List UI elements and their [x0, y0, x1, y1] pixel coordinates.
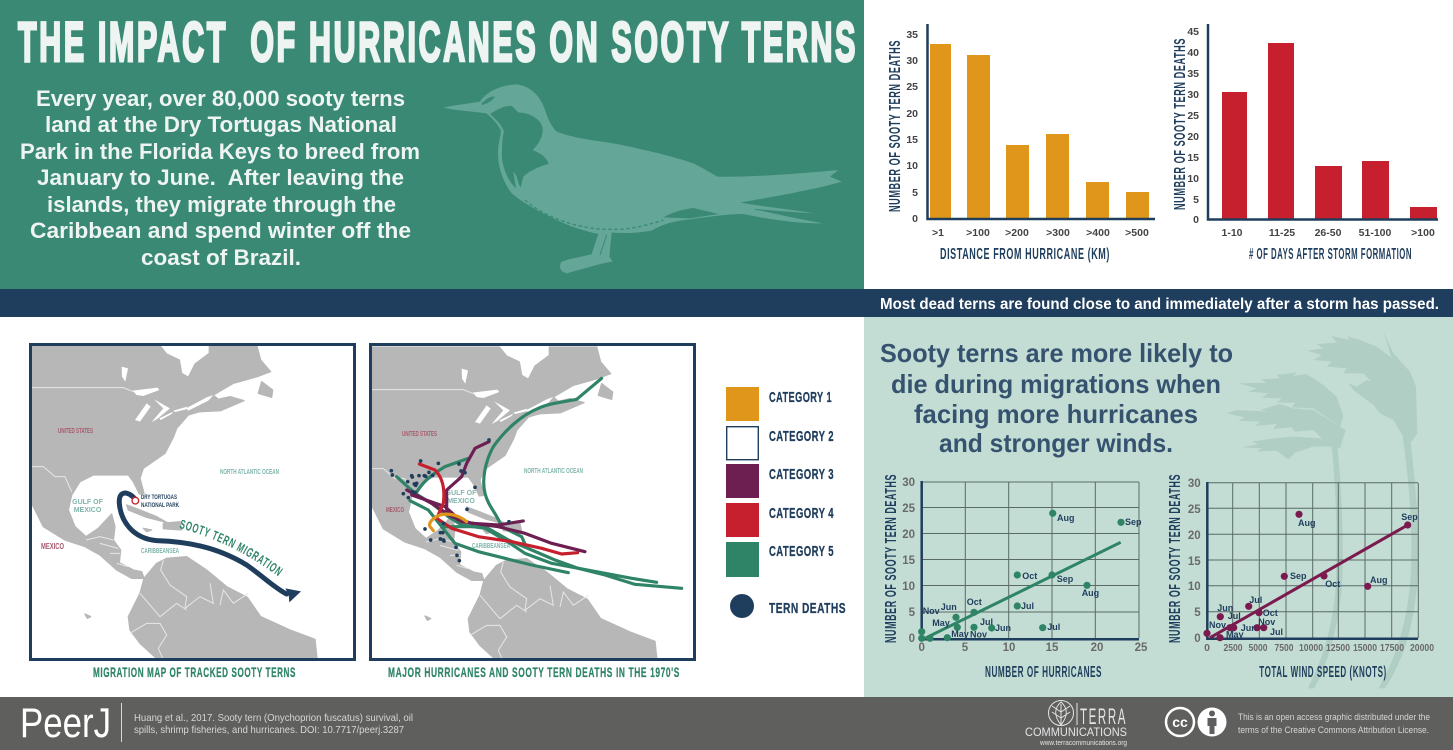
scatter plot: deaths vs total wind speed: Jul — [1270, 627, 1283, 637]
bar chart: deaths by days after storm formation: 15 — [1187, 152, 1199, 164]
labels: place names: NORTH ATLANTIC OCEAN — [220, 469, 279, 476]
labels: place names: MEXICO — [74, 507, 102, 514]
scatter plot: deaths vs number of hurricanes: 30 — [902, 477, 915, 489]
scatter plot: deaths vs total wind speed: Jul — [1249, 595, 1262, 605]
text block: intro paragraph: Caribbean and spend winter off the — [30, 218, 411, 243]
bar chart: deaths by distance from hurricane: 15 — [906, 134, 918, 146]
bar chart: deaths by distance from hurricane: >100 — [966, 227, 990, 239]
text block: intro paragraph — [20, 86, 420, 270]
scatter plot: deaths vs number of hurricanes: 0 — [918, 642, 925, 654]
labels: place names: UNITED STATES — [402, 431, 437, 438]
scatter plot: deaths vs total wind speed: 20 — [1188, 530, 1201, 542]
icon: sooty tern silhouette — [443, 84, 842, 273]
scatter plot: deaths vs number of hurricanes — [883, 474, 1148, 681]
bar chart: deaths by days after storm formation — [1172, 24, 1438, 263]
license text: terms of the Creative Commons Attribution License. — [1238, 725, 1429, 735]
scatter plot: deaths vs number of hurricanes: NUMBER OF SOOTY TERN DEATHS — [883, 474, 900, 643]
legend: TERN DEATHS — [769, 600, 846, 617]
scatter plot: deaths vs number of hurricanes: Nov — [970, 630, 987, 640]
panel: migration map — [29, 343, 356, 661]
scatter plot: deaths vs total wind speed: 5000 — [1248, 642, 1268, 654]
panel: footer — [0, 697, 1453, 750]
citation — [134, 712, 413, 736]
heading: lower right panel: and stronger winds. — [939, 428, 1173, 458]
bar chart: deaths by distance from hurricane: >300 — [1046, 227, 1070, 239]
scatter plot: deaths vs number of hurricanes: May — [932, 618, 950, 628]
bar chart: deaths by days after storm formation: 26-50 — [1315, 227, 1342, 239]
heading: lower right panel: die during migrations when — [891, 369, 1221, 399]
labels: place names: GULF OF — [72, 499, 104, 506]
logo: Terra Communications: COMMUNICATIONS — [1025, 727, 1127, 739]
bar chart: deaths by days after storm formation: 20 — [1187, 131, 1199, 143]
panel: lower right background — [864, 317, 1453, 697]
scatter plot: deaths vs total wind speed: 10 — [1188, 581, 1201, 593]
label: Dry Tortugas National Park: DRY TORTUGAS — [141, 494, 177, 501]
bar chart: deaths by days after storm formation: 1-10 — [1221, 227, 1243, 239]
scatter plot: deaths vs number of hurricanes: 5 — [909, 607, 916, 619]
arrow: migration route — [119, 493, 301, 602]
scatter plot: deaths vs number of hurricanes: Aug — [1082, 588, 1099, 598]
scatter plot: deaths vs number of hurricanes: 10 — [1003, 642, 1015, 654]
labels: place names: CARIBBEANSEA — [472, 543, 510, 550]
labels: place names — [41, 428, 279, 555]
bar chart: deaths by distance from hurricane: DISTANCE FROM HURRICANE (KM) — [940, 246, 1110, 263]
caption: migration map: MIGRATION MAP OF TRACKED SOOTY TERNS — [93, 664, 296, 680]
bar chart: deaths by distance from hurricane: 30 — [906, 55, 918, 67]
icon: creative commons — [1166, 708, 1226, 736]
labels: place names: MEXICO — [386, 507, 404, 514]
bar chart: deaths by days after storm formation: 40 — [1187, 47, 1199, 59]
scatter plot: deaths vs total wind speed: 7500 — [1274, 642, 1294, 654]
legend: CATEGORY 2 — [769, 428, 834, 445]
bar chart: deaths by days after storm formation: 35 — [1187, 68, 1199, 80]
bar chart: deaths by distance from hurricane: 25 — [906, 81, 918, 93]
bar chart: deaths by distance from hurricane: >1 — [932, 227, 944, 239]
scatter plot: deaths vs total wind speed: 17500 — [1380, 642, 1404, 654]
scatter plot: deaths vs total wind speed: Nov — [1258, 617, 1275, 627]
scatter plot: deaths vs number of hurricanes: 5 — [962, 642, 969, 654]
legend: CATEGORY 4 — [769, 505, 834, 522]
scatter plot: deaths vs number of hurricanes: Jul — [1047, 622, 1060, 632]
scatter plot: deaths vs total wind speed — [1167, 474, 1434, 681]
scatter plot: deaths vs number of hurricanes: 10 — [902, 581, 915, 593]
bar chart: deaths by distance from hurricane: >200 — [1005, 227, 1029, 239]
scatter plot: deaths vs total wind speed: Aug — [1298, 518, 1316, 528]
bar chart: deaths by distance from hurricane: 20 — [906, 108, 918, 120]
scatter plot: deaths vs total wind speed: Oct — [1263, 608, 1278, 618]
bar chart: deaths by days after storm formation: 10 — [1187, 173, 1199, 185]
bar chart: deaths by distance from hurricane — [887, 24, 1155, 263]
text block: intro paragraph: Park in the Florida Keys to breed from — [20, 139, 420, 164]
scatter plot: deaths vs number of hurricanes: Aug — [1057, 513, 1074, 523]
scatter plot: deaths vs total wind speed: May — [1226, 630, 1244, 640]
scatter plot: deaths vs total wind speed: Sep — [1401, 512, 1418, 522]
scatter plot: deaths vs number of hurricanes: 25 — [902, 503, 916, 515]
chart: hurricane tracks and tern deaths — [389, 378, 682, 588]
citation: Huang et al., 2017. Sooty tern (Onychoprion fuscatus) survival, oil — [134, 712, 413, 724]
scatter plot: deaths vs total wind speed: Sep — [1290, 571, 1307, 581]
caption: hurricane tracks map: MAJOR HURRICANES AND SOOTY TERN DEATHS IN THE 1970'S — [388, 664, 680, 680]
scatter plot: deaths vs total wind speed: Jun — [1241, 623, 1257, 633]
label: Dry Tortugas National Park — [141, 494, 179, 509]
text block: intro paragraph: land at the Dry Tortugas National — [45, 112, 397, 137]
labels: place names: MEXICO — [447, 498, 475, 505]
heading: lower right panel — [880, 338, 1233, 458]
labels: place names: UNITED STATES — [58, 428, 93, 435]
license text — [1238, 712, 1430, 735]
labels: place names: CARIBBEANSEA — [141, 548, 179, 555]
bar chart: deaths by days after storm formation: 11-25 — [1269, 227, 1295, 239]
label: Dry Tortugas National Park: NATIONAL PARK — [141, 502, 179, 509]
scatter plot: deaths vs number of hurricanes: Oct — [967, 597, 982, 607]
scatter plot: deaths vs number of hurricanes: 20 — [902, 529, 915, 541]
scatter plot: deaths vs number of hurricanes: Sep — [1057, 574, 1074, 584]
bar chart: deaths by distance from hurricane: 5 — [912, 187, 918, 199]
scatter plot: deaths vs number of hurricanes: 15 — [1046, 642, 1059, 654]
text block: intro paragraph: Every year, over 80,000 sooty terns — [36, 86, 405, 111]
scatter plot: deaths vs total wind speed: 2500 — [1224, 642, 1243, 654]
icon: palm trees in wind — [1227, 332, 1418, 688]
label: Sooty tern migration: SOOTY TERN MIGRATION — [180, 520, 284, 576]
scatter plot: deaths vs number of hurricanes: Nov — [923, 606, 940, 616]
bar chart: deaths by distance from hurricane: 10 — [906, 160, 918, 172]
scatter plot: deaths vs total wind speed: NUMBER OF SOOTY TERN DEATHS — [1167, 474, 1184, 643]
scatter plot: deaths vs total wind speed: 0 — [1204, 642, 1210, 654]
icon: creative commons: cc — [1172, 714, 1188, 730]
scatter plot: deaths vs number of hurricanes: Jun — [995, 623, 1011, 633]
bar chart: deaths by distance from hurricane: >500 — [1125, 227, 1149, 239]
panel: hurricane tracks map — [370, 344, 694, 664]
scatter plot: deaths vs number of hurricanes: 20 — [1091, 642, 1103, 654]
heading: lower right panel: facing more hurricanes — [914, 399, 1198, 429]
bar chart: deaths by days after storm formation: 25 — [1187, 110, 1199, 122]
logo: Terra Communications: TERRA — [1080, 704, 1127, 729]
legend — [726, 387, 846, 618]
panel: top green header — [0, 0, 864, 289]
scatter plot: deaths vs number of hurricanes: Jul — [980, 617, 993, 627]
bar chart: deaths by days after storm formation: 45 — [1187, 26, 1199, 38]
citation: spills, shrimp fisheries, and hurricanes. DOI: 10.7717/peerj.3287 — [134, 724, 404, 736]
bar chart: deaths by days after storm formation: 0 — [1193, 214, 1199, 226]
scatter plot: deaths vs number of hurricanes: Jun — [941, 602, 957, 612]
scatter plot: deaths vs number of hurricanes: May — [951, 629, 969, 639]
scatter plot: deaths vs total wind speed: 5 — [1194, 607, 1201, 619]
legend: CATEGORY 5 — [769, 543, 834, 560]
scatter plot: deaths vs total wind speed: 20000 — [1410, 642, 1434, 654]
scatter plot: deaths vs number of hurricanes: 25 — [1135, 642, 1148, 654]
legend: CATEGORY 3 — [769, 466, 834, 483]
scatter plot: deaths vs total wind speed: Jul — [1228, 611, 1241, 621]
license text: This is an open access graphic distributed under the — [1238, 712, 1430, 722]
scatter plot: deaths vs total wind speed: 15 — [1188, 556, 1201, 568]
bar chart: deaths by distance from hurricane: >400 — [1086, 227, 1110, 239]
logo: Terra Communications — [1025, 700, 1127, 747]
logo: Terra Communications: www.terracommunications.org — [1039, 738, 1127, 747]
scatter plot: deaths vs total wind speed: Nov — [1209, 620, 1226, 630]
bar chart: deaths by distance from hurricane: 35 — [906, 29, 918, 41]
banner: key finding — [0, 289, 1453, 317]
bar chart: deaths by distance from hurricane: 0 — [912, 213, 918, 225]
scatter plot: deaths vs total wind speed: 25 — [1188, 504, 1201, 516]
scatter plot: deaths vs number of hurricanes: Jul — [1021, 601, 1034, 611]
labels: place names: MEXICO — [41, 541, 64, 551]
logo: PeerJ: PeerJ — [20, 699, 111, 746]
bar chart: deaths by days after storm formation: 5 — [1193, 194, 1199, 206]
scatter plot: deaths vs total wind speed: 30 — [1188, 478, 1201, 490]
text block: intro paragraph: islands, they migrate through the — [47, 192, 396, 217]
scatter plot: deaths vs total wind speed: 0 — [1194, 633, 1201, 645]
scatter plot: deaths vs total wind speed: 15000 — [1353, 642, 1377, 654]
scatter plot: deaths vs number of hurricanes: Sep — [1125, 517, 1142, 527]
text block: intro paragraph: coast of Brazil. — [141, 245, 301, 270]
scatter plot: deaths vs total wind speed: Oct — [1325, 579, 1340, 589]
labels: place names: GULF OF — [446, 490, 477, 497]
heading: lower right panel: Sooty terns are more likely to — [880, 338, 1233, 368]
legend: CATEGORY 1 — [769, 389, 832, 406]
scatter plot: deaths vs total wind speed: 12500 — [1326, 642, 1350, 654]
scatter plot: deaths vs number of hurricanes: Oct — [1022, 571, 1037, 581]
scatter plot: deaths vs total wind speed: Aug — [1370, 575, 1388, 585]
scatter plot: deaths vs number of hurricanes: 15 — [902, 555, 916, 567]
bar chart: deaths by days after storm formation: 51-100 — [1359, 227, 1392, 239]
labels: place names: NORTH ATLANTIC OCEAN — [524, 468, 583, 475]
scatter plot: deaths vs number of hurricanes: NUMBER OF HURRICANES — [985, 664, 1102, 681]
scatter plot: deaths vs number of hurricanes: 0 — [909, 633, 915, 645]
bar chart: deaths by days after storm formation: 30 — [1187, 89, 1199, 101]
bar chart: deaths by days after storm formation: >100 — [1411, 227, 1435, 239]
scatter plot: deaths vs total wind speed: 10000 — [1299, 642, 1323, 654]
text block: intro paragraph: January to June. After leaving the — [37, 165, 404, 190]
scatter plot: deaths vs total wind speed: Jun — [1217, 603, 1233, 613]
labels: place names — [386, 431, 583, 550]
